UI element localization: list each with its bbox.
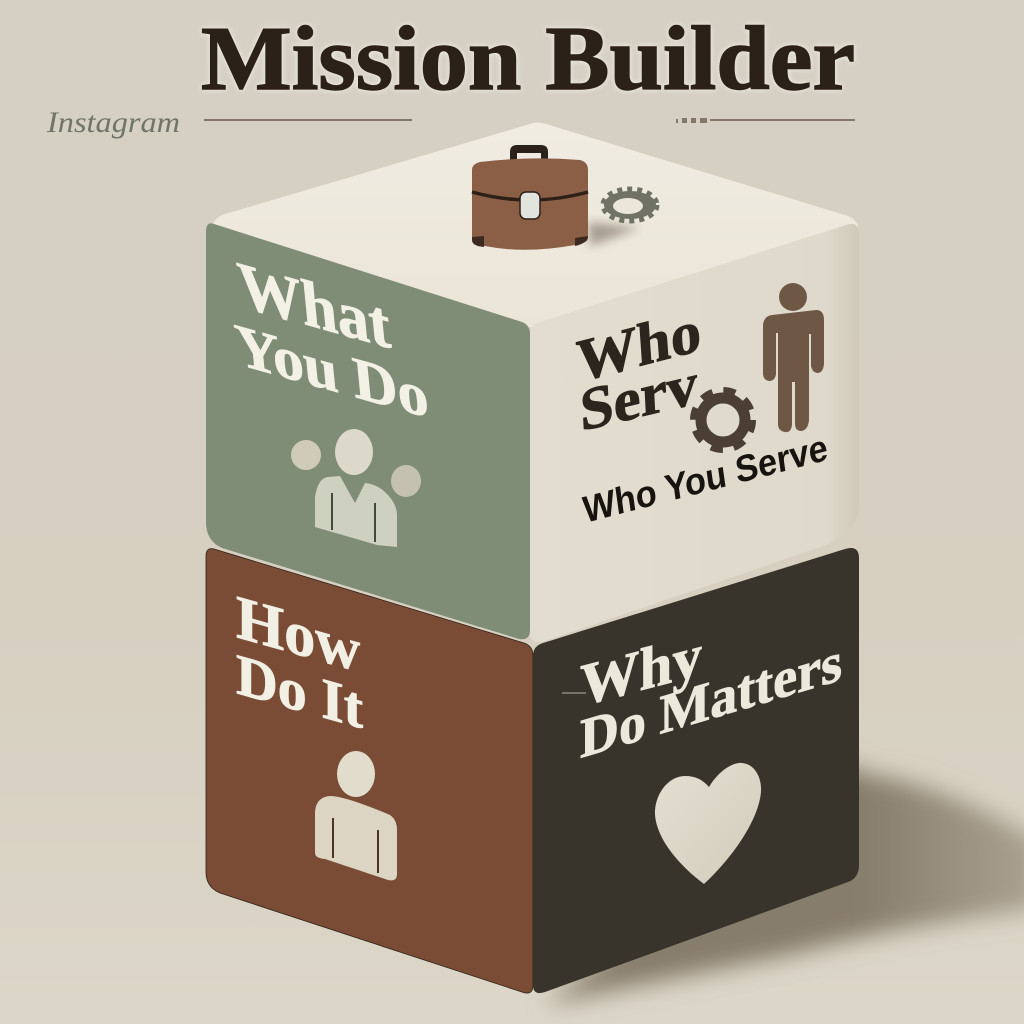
icon: gear — [694, 391, 752, 449]
panel: What You Do face — [206, 223, 530, 639]
heading: How Do It — [236, 582, 363, 741]
briefcase shadow — [588, 222, 640, 246]
heading: How Do It: How — [236, 582, 360, 686]
handwritten label: Instagram: Instagram — [46, 106, 180, 139]
heading: Why Do Matters: Why — [580, 622, 702, 720]
rule: left header line — [204, 119, 412, 121]
heading: Who Serv — [574, 298, 703, 445]
lower block — [206, 548, 859, 993]
heading: What You Do: What — [234, 247, 394, 363]
icon: standing person — [763, 283, 824, 432]
dash mark — [562, 692, 586, 694]
icon: person — [315, 751, 397, 880]
heading: Why Do Matters: Do Matters — [580, 630, 842, 771]
icon: heart — [655, 763, 761, 884]
panel: Who You Serve face — [530, 224, 859, 642]
heading: What You Do — [232, 247, 431, 432]
heading: How Do It: Do It — [236, 641, 363, 741]
panel: How Do It face — [206, 549, 533, 993]
heading: What You Do: You Do — [232, 311, 431, 432]
icon: briefcase — [472, 145, 588, 250]
heading: Who Serv: Serv — [578, 351, 699, 445]
panel: Why Do Matters face — [533, 548, 859, 993]
title: Mission Builder — [201, 8, 855, 109]
heading: Who Serv: Who — [574, 298, 703, 396]
icon: small gear — [603, 189, 657, 221]
icon: group of people — [291, 429, 421, 547]
upper block — [206, 122, 859, 642]
cast shadow — [545, 760, 1024, 1004]
rule: right header line with tick marks — [676, 118, 855, 123]
panel: top face — [213, 122, 858, 328]
caption: Who You Serve: Who You Serve — [580, 427, 830, 532]
